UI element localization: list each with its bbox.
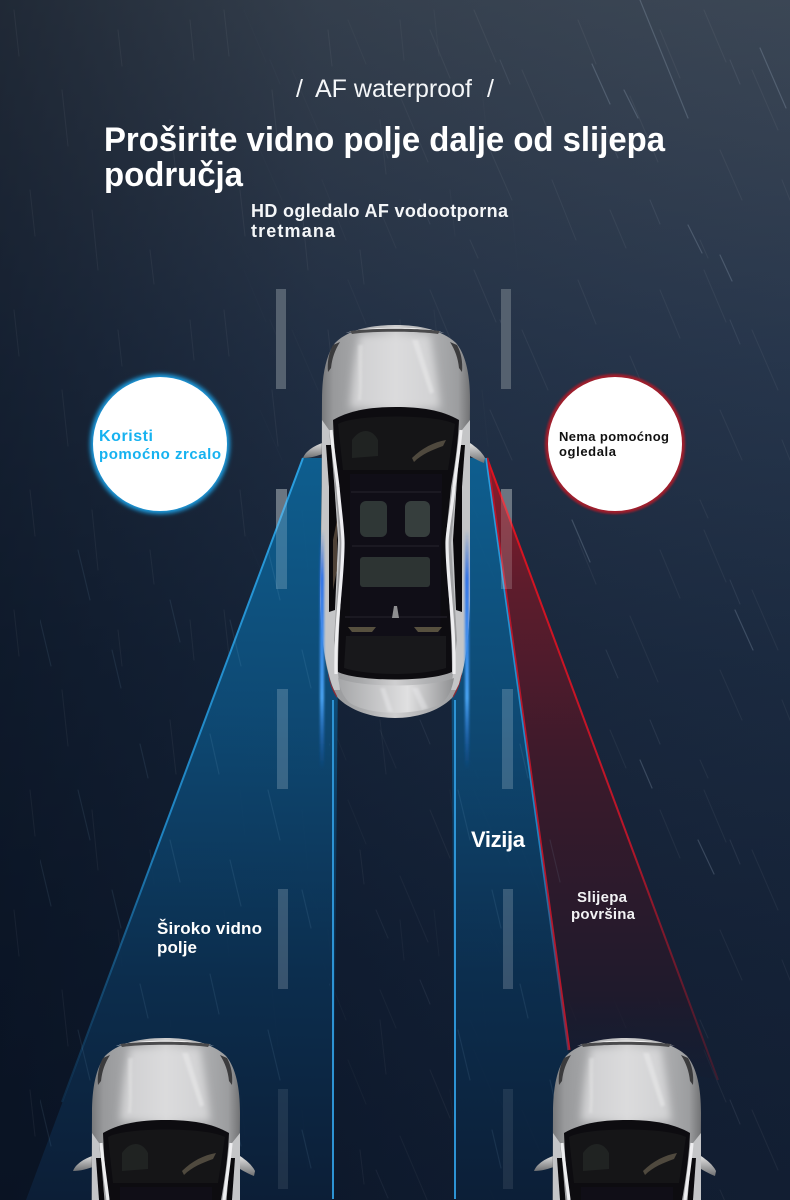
subtitle <box>251 201 509 241</box>
eyebrow: AF waterproof: / <box>296 75 303 103</box>
eyebrow: AF waterproof: AF waterproof <box>315 75 472 103</box>
rain over beams <box>40 540 566 1200</box>
label: wide field of view: Široko vidno <box>157 919 262 938</box>
label: blind area: površina <box>571 906 636 923</box>
right red blind spot beam <box>487 458 718 1080</box>
label: blind area <box>571 889 636 923</box>
left rear car <box>73 1038 255 1200</box>
right blue vision beam <box>450 458 590 1200</box>
label: blind area: Slijepa <box>577 889 628 906</box>
title: područja <box>104 156 244 194</box>
title: Proširite vidno polje dalje od slijepa <box>104 121 666 159</box>
badge: no auxiliary mirror <box>545 374 685 514</box>
title <box>104 121 666 194</box>
subtitle: HD ogledalo AF vodootporna <box>251 201 509 221</box>
badge: with auxiliary mirror <box>90 374 230 514</box>
left blue wide field of view beam <box>26 458 340 1200</box>
subtitle: tretmana <box>251 221 336 241</box>
label: vision: Vizija <box>471 827 526 852</box>
blue glow along main car sides <box>320 530 469 790</box>
badge: no auxiliary mirror: ogledala <box>559 444 617 459</box>
lane dashes seen through beams <box>276 489 513 1189</box>
badge: with auxiliary mirror: pomoćno zrcalo <box>99 446 221 463</box>
eyebrow: AF waterproof: / <box>487 75 494 103</box>
lane markings <box>276 289 513 1189</box>
main car, top view <box>303 325 485 718</box>
badge: no auxiliary mirror: Nema pomoćnog <box>559 429 669 444</box>
label: wide field of view: polje <box>157 938 197 957</box>
right rear car <box>534 1038 716 1200</box>
badge: with auxiliary mirror: Koristi <box>99 428 153 445</box>
label: wide field of view <box>157 919 262 957</box>
